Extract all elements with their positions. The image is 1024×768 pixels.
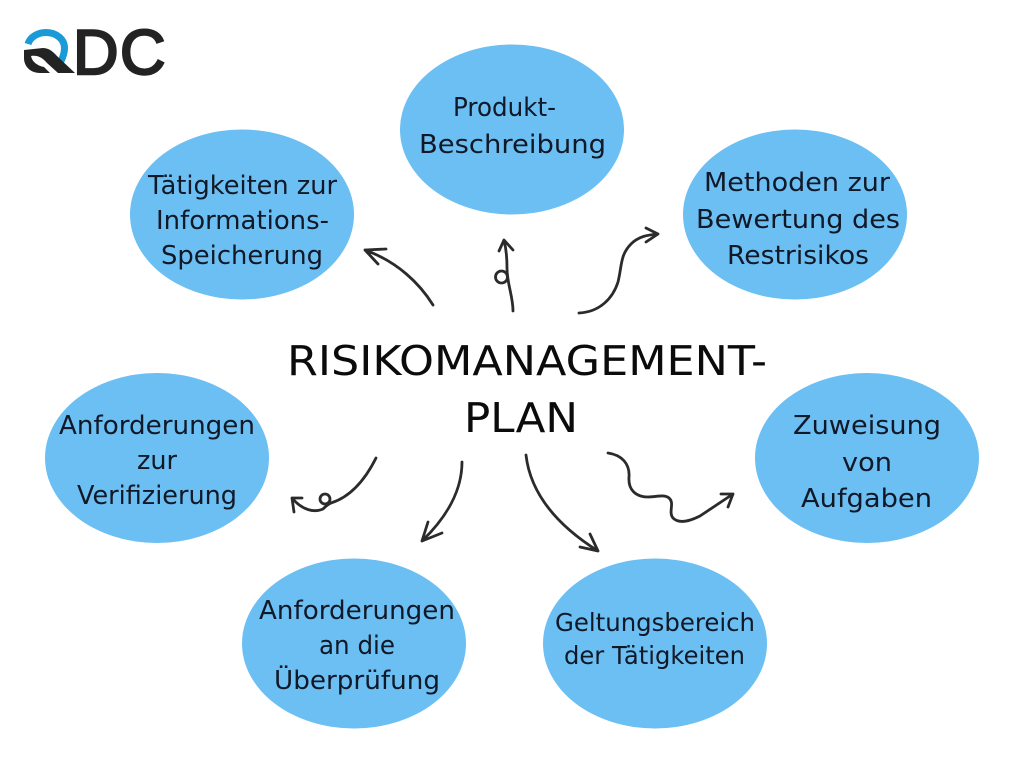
title: RISIKOMANAGEMENT- bbox=[287, 337, 767, 385]
node: Tätigkeiten zur Informations-Speicherung: Speicherung bbox=[161, 241, 323, 271]
logo wordmark: DC bbox=[73, 18, 166, 88]
node: Geltungsbereich der Tätigkeiten: Geltungsbereich bbox=[555, 608, 755, 637]
node: Anforderungen an die Überprüfung: Anforderungen bbox=[259, 596, 455, 626]
node: Methoden zur Bewertung des Restrisikos bbox=[683, 130, 907, 300]
node: Tätigkeiten zur Informations-Speicherung: Informations- bbox=[156, 206, 329, 236]
node: Anforderungen an die Überprüfung bbox=[242, 558, 466, 728]
node: Methoden zur Bewertung des Restrisikos: Bewertung des bbox=[696, 205, 900, 235]
node: Tätigkeiten zur Informations-Speicherung: Tätigkeiten zur bbox=[147, 171, 337, 201]
node: Anforderungen an die Überprüfung: Überprüfung bbox=[274, 664, 440, 696]
title: PLAN bbox=[464, 394, 578, 442]
node: Produkt-Beschreibung bbox=[400, 44, 624, 214]
node: Methoden zur Bewertung des Restrisikos: Methoden zur bbox=[704, 168, 890, 198]
arrow: to Anforderungen zur Verifizierung with loop bbox=[292, 458, 376, 512]
node: Zuweisung von Aufgaben: von bbox=[842, 448, 892, 478]
node: Anforderungen zur Verifizierung: Anforderungen bbox=[59, 411, 255, 441]
node: Zuweisung von Aufgaben bbox=[755, 373, 979, 543]
node: Produkt-Beschreibung: Beschreibung bbox=[419, 130, 606, 160]
node: Anforderungen zur Verifizierung: zur bbox=[137, 446, 177, 476]
arrow: to Anforderungen an die Überprüfung bbox=[422, 462, 462, 541]
node: Anforderungen zur Verifizierung bbox=[45, 373, 269, 543]
node: Anforderungen zur Verifizierung: Verifizierung bbox=[77, 481, 237, 511]
node: Produkt-Beschreibung: Produkt- bbox=[453, 93, 556, 123]
arrow: to Produkt-Beschreibung with loop bbox=[496, 240, 513, 311]
arrow: to Methoden bbox=[579, 228, 658, 313]
arrow: to Zuweisung, wavy bbox=[608, 453, 733, 522]
node: Zuweisung von Aufgaben: Aufgaben bbox=[801, 484, 932, 514]
arrow: to Geltungsbereich bbox=[526, 455, 598, 551]
node: Methoden zur Bewertung des Restrisikos: Restrisikos bbox=[727, 241, 869, 271]
node: Tätigkeiten zur Informations-Speicherung bbox=[130, 130, 354, 300]
logo: QDC bbox=[24, 18, 166, 88]
logo icon: Q mark bbox=[24, 32, 75, 73]
title bbox=[287, 337, 767, 442]
node: Zuweisung von Aufgaben: Zuweisung bbox=[793, 411, 941, 441]
node: Anforderungen an die Überprüfung: an die bbox=[319, 631, 395, 661]
arrow: to Tätigkeiten bbox=[365, 249, 433, 305]
node: Geltungsbereich der Tätigkeiten: der Tätigkeiten bbox=[564, 641, 745, 670]
node: Geltungsbereich der Tätigkeiten bbox=[543, 558, 767, 728]
